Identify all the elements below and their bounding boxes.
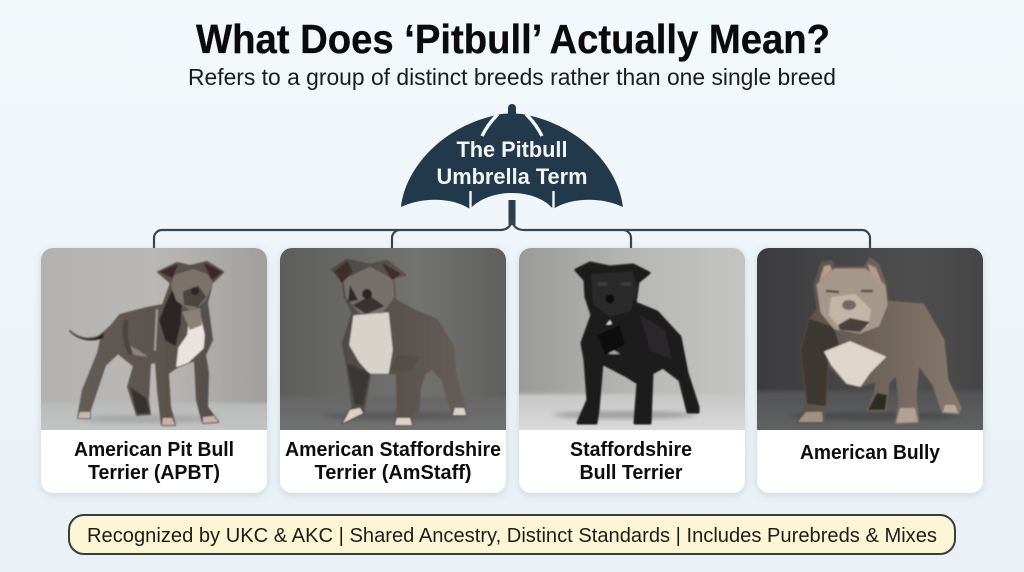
panel: Staffordshire Bull Terrier: Staffordshire [570,439,692,461]
icon: umbrella with term label: Umbrella Term [436,164,588,189]
connector lines [154,222,870,248]
panel: American Pit Bull Terrier: Terrier (APBT) [88,462,220,484]
panel: Staffordshire Bull Terrier [516,248,748,498]
panel: American Staffordshire Terrier: American Staffordshire [285,439,501,461]
photo: black Staffordshire [519,248,745,430]
photo: grey pit bull terrier [41,248,267,430]
callout: summary facts bar [69,515,955,554]
panel: American Pit Bull Terrier: American Pit Bull [74,439,234,461]
panel: American Bully [754,248,986,498]
panel: American Staffordshire Terrier [278,248,508,498]
icon: umbrella with term label: The Pitbull [456,137,568,162]
panel: American Staffordshire Terrier: Terrier (AmStaff) [314,462,472,484]
icon: umbrella with term label [401,104,623,225]
panel: American Pit Bull Terrier [38,248,270,498]
title: What Does ‘Pitbull’ Actually Mean? [196,16,830,62]
photo: blue-grey AmStaff [280,248,506,430]
subtitle: Refers to a group of distinct breeds rather than one single breed [188,64,836,90]
panel: Staffordshire Bull Terrier: Bull Terrier [580,462,683,484]
panel: American Bully: American Bully [800,442,941,464]
photo: American Bully [757,248,983,430]
callout: summary facts bar: Recognized by UKC & AKC | Shared Ancestry, Distinct Standards | Includes Purebreds & Mixes [87,525,937,547]
